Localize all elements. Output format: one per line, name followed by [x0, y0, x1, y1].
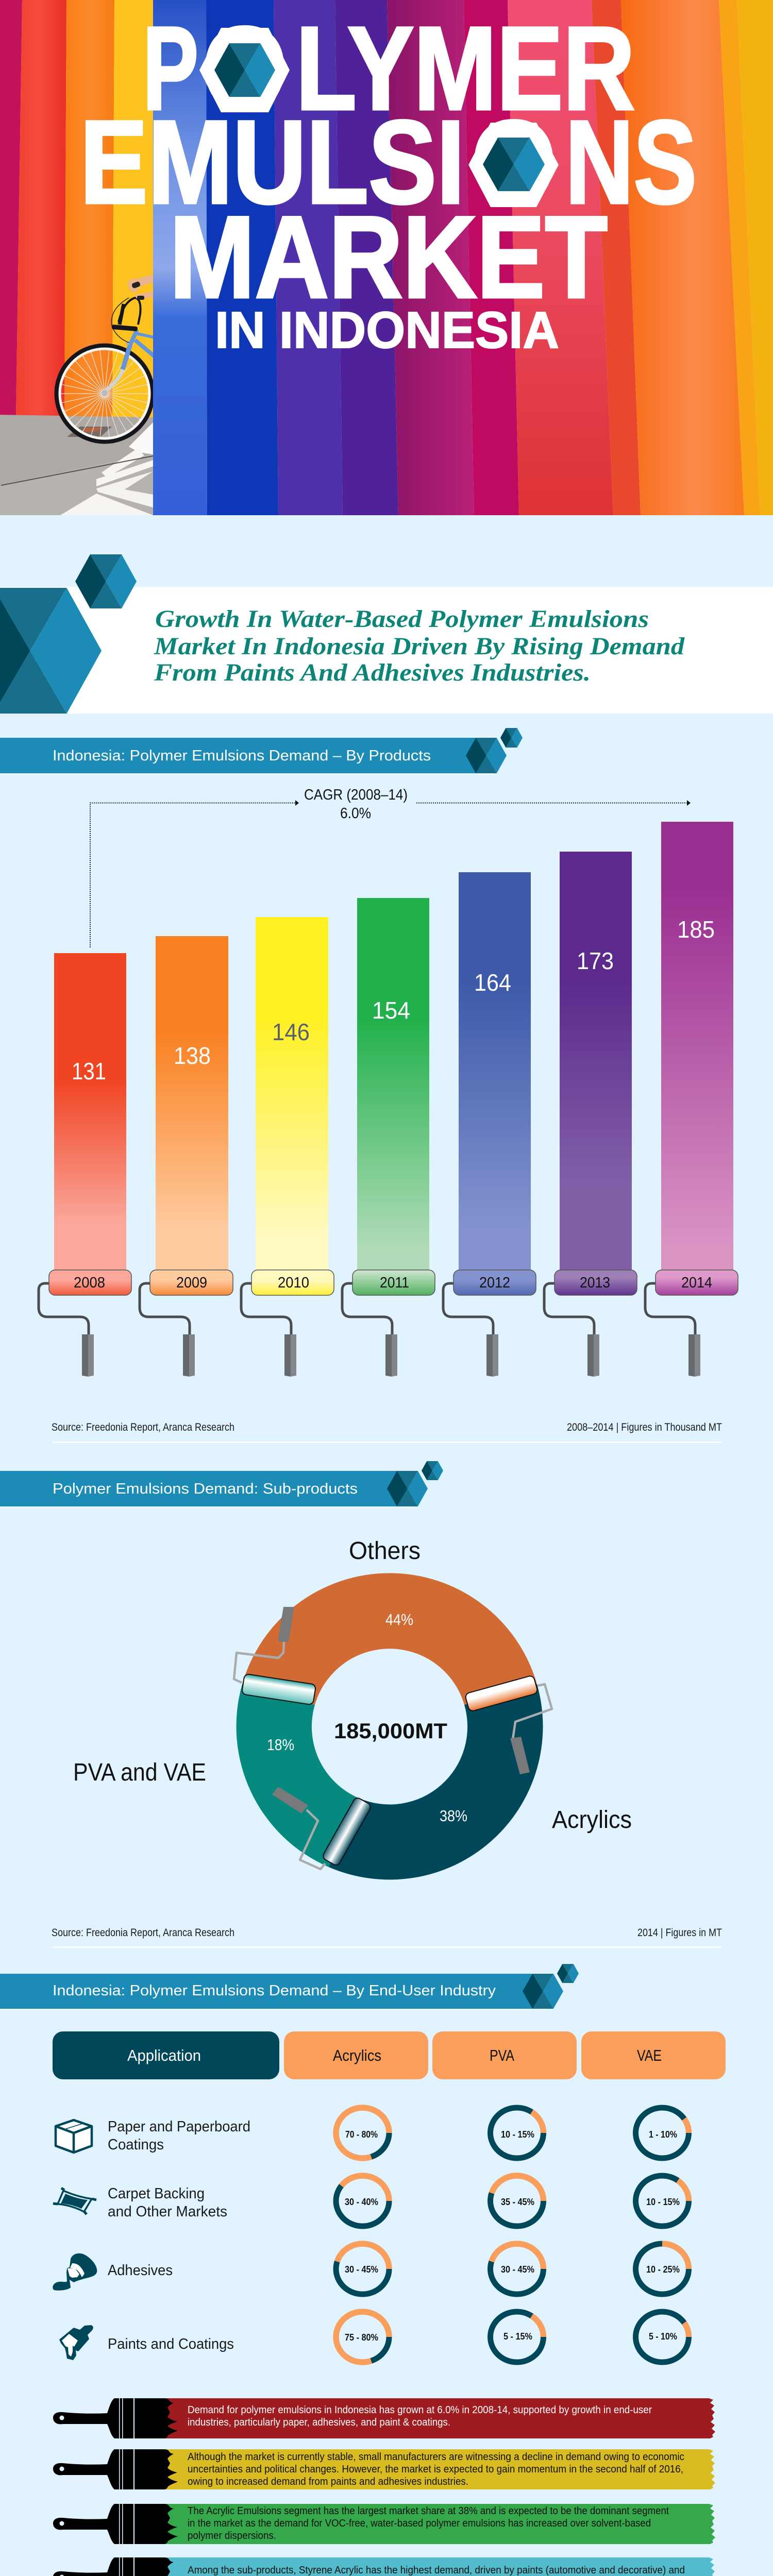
row: paper and paperboard coatings: 1 - 10% — [649, 2129, 677, 2140]
ring: 10-15% — [491, 2108, 543, 2158]
bar 2014: 2014 — [681, 1275, 712, 1291]
row: paints and coatings: 5 - 15% — [503, 2331, 532, 2342]
callout: yellow brush stroke: uncertainties and political changes. However, the market is expected to gain momentum in the second half of 2016, — [188, 2463, 683, 2475]
headline text: From Paints And Adhesives Industries. — [154, 659, 591, 686]
row label: Carpet Backing — [108, 2185, 205, 2202]
section heading: end-user industry: Indonesia: Polymer Emulsions Demand – By End-User Industry — [53, 1982, 496, 1999]
hero banner — [0, 0, 773, 515]
table header: PVA — [490, 2046, 514, 2064]
roller: PVA and VAE / acrylics — [272, 1787, 372, 1869]
annotation: CAGR arrow: 6.0% — [340, 805, 371, 822]
row: carpet backing and other markets: 30 - 40% — [345, 2196, 378, 2207]
roller: others / PVA and VAE — [234, 1607, 316, 1705]
bar 2010: 146 — [272, 1019, 310, 1045]
bar 2011: 154 — [372, 997, 410, 1024]
bar 2009: 138 — [174, 1042, 211, 1069]
bar 2013 — [544, 852, 637, 1377]
section heading: sub-products — [0, 1461, 443, 1507]
donut chart: sub-products — [73, 1537, 632, 1879]
ring: 75-80% — [336, 2312, 389, 2362]
headline text: Market In Indonesia Driven By Rising Demand — [154, 633, 685, 660]
bar 2009 — [140, 936, 233, 1377]
title — [80, 2, 697, 359]
segment: acrylics 38% — [329, 1684, 543, 1879]
ring: 70-80% — [336, 2108, 389, 2158]
donut labels: 44% — [385, 1611, 413, 1629]
row: adhesives: 10 - 25% — [646, 2264, 680, 2275]
title: NS — [565, 96, 697, 228]
ring: 35-45% — [491, 2176, 543, 2226]
table header — [53, 2031, 726, 2079]
ring: 30-45% — [336, 2244, 389, 2294]
callout: yellow brush stroke: owing to increased demand from paints and adhesives industries. — [188, 2476, 468, 2487]
row: paper and paperboard coatings — [56, 2108, 688, 2158]
donut labels: Acrylics — [552, 1806, 632, 1834]
row: adhesives — [53, 2244, 688, 2294]
source note: by products: Source: Freedonia Report, Aranca Research — [52, 1421, 234, 1433]
title: MARKET — [170, 192, 608, 322]
callout: red brush stroke: industries, particularly paper, adhesives, and paint & coatings. — [188, 2416, 450, 2428]
ring: 30-40% — [336, 2176, 389, 2226]
source note: by products — [52, 1421, 722, 1433]
panel: headline band — [0, 554, 773, 714]
row label — [108, 2185, 227, 2220]
icon: box — [56, 2120, 92, 2153]
table header: Acrylics — [333, 2046, 381, 2064]
segment: PVA and VAE 18% — [237, 1684, 359, 1867]
ring: 30-45% — [491, 2244, 543, 2294]
bar 2008 — [39, 953, 131, 1377]
source note: sub-products: 2014 | Figures in MT — [637, 1927, 722, 1939]
callout: blue brush stroke: Among the sub-products, Styrene Acrylic has the highest demand, driven by paints (automotive and decorative) and — [188, 2564, 685, 2576]
callout: red brush stroke: Demand for polymer emulsions in Indonesia has grown at 6.0% in 2008-14, supported by growth in end-user — [188, 2404, 652, 2416]
icon: small hexagon — [75, 554, 137, 608]
donut labels: 38% — [440, 1807, 467, 1825]
source note: sub-products — [52, 1927, 722, 1939]
ring: 1-10% — [636, 2108, 688, 2158]
icon: paint brush — [59, 2325, 93, 2360]
row: adhesives: 30 - 45% — [345, 2264, 378, 2275]
icon: carpet — [53, 2188, 96, 2214]
bar 2009: 2009 — [176, 1275, 207, 1291]
bar 2008: 2008 — [74, 1275, 105, 1291]
headline text: Growth In Water-Based Polymer Emulsions — [155, 605, 649, 633]
headline text — [154, 605, 685, 686]
segment: others 44% — [242, 1573, 537, 1705]
ring: 10-15% — [636, 2176, 688, 2226]
title: EMULSI — [80, 96, 465, 228]
table header: VAE — [637, 2046, 662, 2064]
section heading: by products — [0, 728, 523, 774]
title: O — [471, 96, 557, 228]
annotation: CAGR arrow: CAGR (2008–14) — [304, 787, 408, 803]
table header: Application — [127, 2046, 201, 2064]
callout: green brush stroke: in the market as the demand for VOC-free, water-based polymer emulsions has increased over solvent-based — [188, 2517, 651, 2529]
hero photo: coloured stripes and bicycle — [0, 0, 773, 515]
bar 2014: 185 — [677, 916, 715, 943]
row label: Paints and Coatings — [108, 2336, 234, 2352]
row label: Adhesives — [108, 2262, 173, 2279]
source note: sub-products: Source: Freedonia Report, Aranca Research — [52, 1927, 234, 1939]
callout: blue brush stroke — [53, 2557, 715, 2576]
row: paints and coatings — [59, 2312, 688, 2362]
section heading: by products: Indonesia: Polymer Emulsions Demand – By Products — [53, 748, 431, 764]
source note: by products: 2008–2014 | Figures in Thousand MT — [567, 1421, 722, 1433]
row label: and Other Markets — [108, 2204, 227, 2220]
donut labels: 185,000MT — [334, 1719, 447, 1743]
callout: green brush stroke: polymer dispersions. — [188, 2530, 276, 2541]
icon: large hexagon — [0, 588, 102, 714]
icon: adhesive tube — [53, 2253, 97, 2291]
hexagon letter O in EMULSIONS — [468, 123, 559, 207]
row: paints and coatings: 75 - 80% — [345, 2332, 378, 2343]
ring: 5-15% — [491, 2312, 543, 2362]
annotation: CAGR arrow — [90, 787, 691, 947]
ring: 10-25% — [636, 2244, 688, 2294]
row label — [108, 2119, 250, 2153]
ring: 5-10% — [636, 2312, 688, 2362]
callout: green brush stroke: The Acrylic Emulsions segment has the largest market share at 38% and is expected to be the dominant segment — [188, 2505, 669, 2517]
bar chart: paint-roller bars — [39, 822, 738, 1377]
donut labels: 18% — [267, 1736, 294, 1754]
callout: green brush stroke — [53, 2504, 715, 2544]
bar 2010: 2010 — [278, 1275, 309, 1291]
row: adhesives: 30 - 45% — [501, 2264, 534, 2275]
title: IN INDONESIA — [215, 301, 559, 359]
row: paper and paperboard coatings: 70 - 80% — [345, 2129, 378, 2140]
donut labels: PVA and VAE — [73, 1759, 206, 1786]
row label: Paper and Paperboard — [108, 2119, 250, 2135]
row label: Coatings — [108, 2137, 164, 2153]
roller: others / acrylics — [465, 1675, 552, 1774]
donut labels: Others — [349, 1537, 421, 1565]
title: LYMER — [296, 2, 635, 134]
row: carpet backing and other markets: 35 - 45% — [501, 2196, 534, 2207]
bar 2010 — [241, 917, 334, 1377]
callout: yellow brush stroke — [53, 2449, 715, 2489]
section heading: end-user industry — [0, 1964, 579, 2010]
title: O — [202, 2, 288, 134]
bar 2014 — [645, 822, 738, 1377]
bar 2011 — [342, 898, 435, 1377]
section heading: sub-products: Polymer Emulsions Demand: Sub-products — [53, 1481, 358, 1497]
donut labels — [73, 1537, 632, 1834]
bar 2013: 173 — [577, 947, 614, 974]
bar 2008: 131 — [72, 1058, 106, 1084]
row: paper and paperboard coatings: 10 - 15% — [501, 2129, 534, 2140]
hexagon letter O in POLYMER — [199, 28, 290, 112]
callout: red brush stroke — [53, 2398, 715, 2438]
bar 2012: 2012 — [479, 1275, 510, 1291]
bar 2012: 164 — [474, 969, 511, 996]
callout: yellow brush stroke: Although the market is currently stable, small manufacturers are witnessing a decline in demand owing to economic — [188, 2451, 684, 2463]
row: carpet backing and other markets: 10 - 15% — [646, 2196, 680, 2207]
title: P — [143, 2, 198, 134]
bar 2012 — [443, 872, 536, 1377]
row: carpet backing and other markets — [53, 2176, 688, 2226]
bar 2011: 2011 — [380, 1275, 409, 1291]
bar 2013: 2013 — [580, 1275, 610, 1291]
row: paints and coatings: 5 - 10% — [649, 2331, 677, 2342]
